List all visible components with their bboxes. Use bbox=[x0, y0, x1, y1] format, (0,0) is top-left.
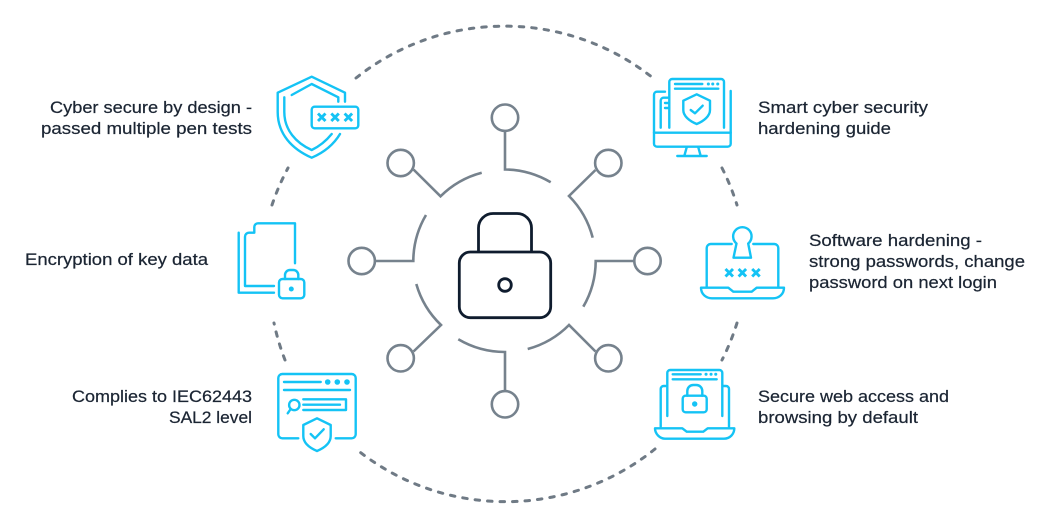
icon: browser window with shield bbox=[278, 374, 356, 451]
node: bottom bbox=[458, 339, 518, 417]
label: cyber secure by design bbox=[41, 98, 252, 138]
label: smart cyber security hardening guide: Smart cyber security bbox=[758, 98, 929, 117]
label: secure web access bbox=[758, 387, 949, 427]
dashed outer ring bbox=[272, 26, 737, 502]
label: encryption of key data: Encryption of key data bbox=[25, 250, 209, 269]
label: software hardening: Software hardening - bbox=[809, 231, 982, 250]
icon: locked documents bbox=[239, 223, 304, 298]
icon: shield with password bbox=[278, 77, 358, 158]
label: complies to IEC62443: Complies to IEC62443 bbox=[72, 387, 252, 406]
label: cyber secure by design: Cyber secure by design - bbox=[50, 98, 252, 117]
node: right bbox=[583, 248, 661, 307]
node: upper left bbox=[388, 150, 482, 196]
icon: central padlock bbox=[459, 214, 551, 318]
label: software hardening: strong passwords, change bbox=[809, 252, 1025, 271]
label: smart cyber security hardening guide bbox=[758, 98, 929, 138]
icon: laptop with keyhole bbox=[701, 227, 784, 298]
icon: laptop with browser and lock bbox=[655, 370, 734, 439]
label: smart cyber security hardening guide: hardening guide bbox=[758, 119, 891, 138]
label: software hardening bbox=[809, 231, 1025, 292]
label: software hardening: password on next login bbox=[809, 273, 997, 292]
node: lower right bbox=[528, 325, 622, 371]
node: lower left bbox=[388, 284, 441, 371]
label: secure web access: browsing by default bbox=[758, 408, 918, 427]
node: left bbox=[348, 215, 426, 274]
label: complies to IEC62443: SAL2 level bbox=[169, 408, 252, 427]
node: upper right bbox=[569, 150, 622, 238]
central network diagram bbox=[348, 104, 661, 417]
label: cyber secure by design: passed multiple pen tests bbox=[41, 119, 252, 138]
icon: monitor with shield bbox=[654, 79, 731, 156]
node: top bbox=[492, 104, 551, 182]
label: secure web access: Secure web access and bbox=[758, 387, 949, 406]
label: complies to IEC62443 bbox=[72, 387, 252, 427]
